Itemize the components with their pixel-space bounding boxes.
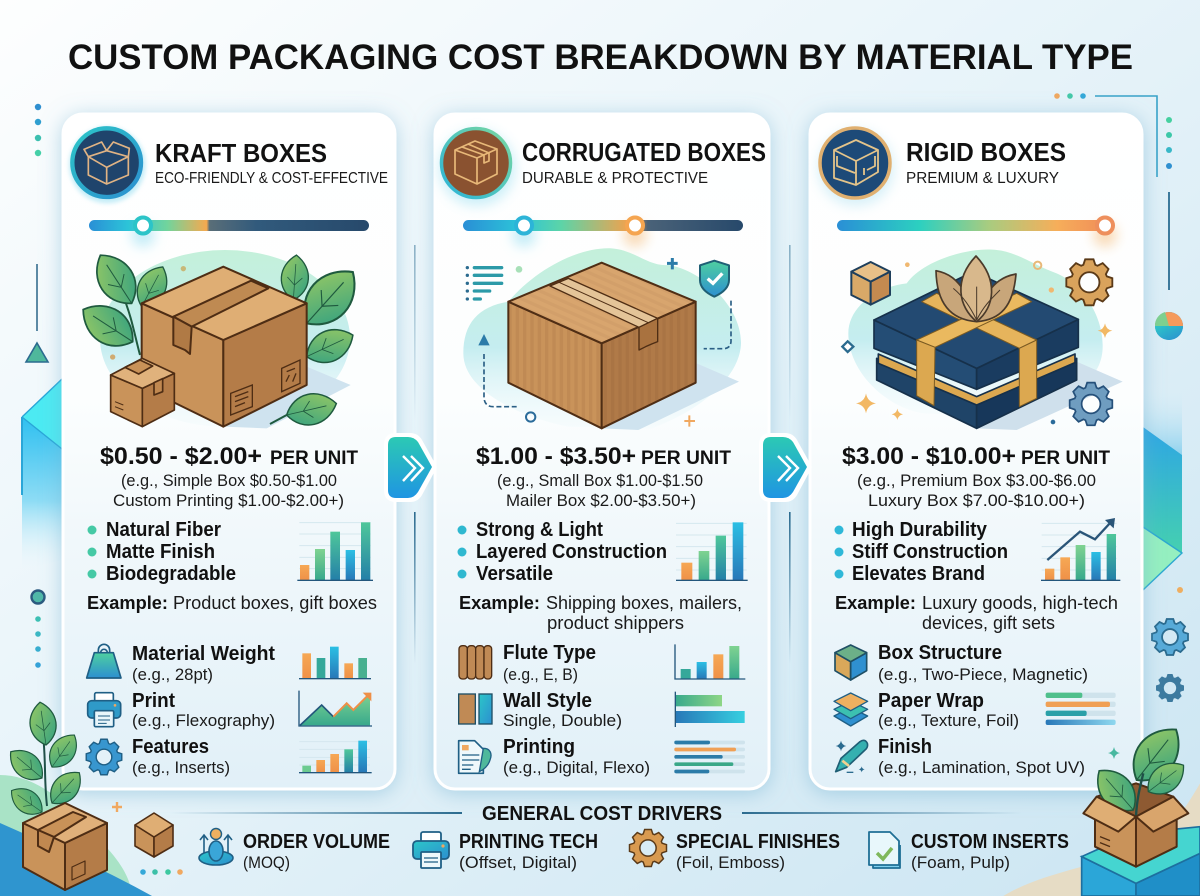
icon: document with check — [869, 832, 900, 868]
price: PER UNIT — [641, 448, 731, 469]
example: Product boxes, gift boxes — [173, 593, 377, 613]
arrow: corrugated to rigid — [759, 433, 812, 502]
bar chart: features — [297, 522, 373, 581]
price — [842, 443, 1110, 470]
icon: gear — [86, 739, 122, 775]
feature list: Stiff Construction — [852, 541, 1008, 563]
icon: gear — [630, 830, 666, 866]
card subtitle: DURABLE & PROTECTIVE — [522, 170, 708, 187]
feature list: Biodegradable — [106, 563, 236, 585]
progress bars: printing — [674, 741, 745, 773]
driver: printing tech — [413, 831, 598, 872]
panel: rigid boxes — [810, 114, 1142, 789]
example: Example: — [459, 593, 540, 613]
feature list: Elevates Brand — [852, 563, 985, 585]
left side decoration — [21, 104, 62, 668]
bottom left corner illustration: plant and box — [3, 700, 107, 890]
driver: order volume — [199, 828, 390, 872]
row: finish: Finish — [878, 736, 932, 758]
price: $1.00 - $3.50+ — [476, 443, 636, 470]
icon: pen with sparkles — [836, 740, 868, 772]
feature list — [458, 519, 667, 585]
row: print: (e.g., Flexography) — [132, 711, 275, 730]
row: flute type — [459, 642, 745, 684]
small box and dots, bottom left — [112, 802, 183, 875]
price — [476, 443, 731, 470]
title: CUSTOM PACKAGING COST BREAKDOWN BY MATERIAL TYPE — [68, 38, 1133, 77]
row: printing: Printing — [503, 736, 575, 758]
price examples: Mailer Box $2.00-$3.50+) — [506, 491, 696, 510]
price examples — [497, 471, 703, 510]
row: features: (e.g., Inserts) — [132, 758, 230, 777]
cost slider — [463, 218, 743, 247]
example — [459, 593, 742, 633]
row: flute type: (e.g., E, B) — [503, 665, 578, 684]
example: Example: — [835, 593, 916, 613]
icon: layers — [834, 693, 868, 726]
feature list — [88, 519, 236, 585]
icon: rigid box badge — [818, 128, 894, 206]
row: material weight: Material Weight — [132, 643, 275, 665]
icon: weight — [87, 644, 121, 678]
driver: special finishes: SPECIAL FINISHES — [676, 831, 840, 853]
icon: wall panels — [459, 694, 492, 724]
row: features: Features — [132, 736, 209, 758]
area chart: print — [299, 691, 372, 726]
driver: special finishes: (Foil, Emboss) — [676, 853, 785, 872]
row: print — [88, 690, 372, 730]
driver: custom inserts: (Foam, Pulp) — [911, 853, 1010, 872]
icon: document — [459, 741, 491, 773]
icon: cube — [851, 262, 890, 305]
price examples: Luxury Box $7.00-$10.00+) — [868, 491, 1085, 510]
price: PER UNIT — [1021, 448, 1110, 469]
icon: flute columns — [459, 646, 492, 679]
feature list: High Durability — [852, 519, 988, 541]
feature list: Natural Fiber — [106, 519, 221, 541]
terrain behind bottom left corner — [0, 775, 152, 896]
price examples — [113, 471, 344, 510]
feature list: Matte Finish — [106, 541, 215, 563]
price — [100, 443, 358, 470]
panel: kraft boxes — [63, 114, 395, 789]
example — [835, 593, 1118, 633]
row: printing — [459, 736, 745, 777]
row: flute type: Flute Type — [503, 642, 596, 664]
row: wall style: Wall Style — [503, 690, 592, 712]
card subtitle: PREMIUM & LUXURY — [906, 170, 1059, 187]
bar chart: wall style — [675, 692, 745, 727]
row: print: Print — [132, 690, 175, 712]
icon: people with arrows — [199, 828, 233, 865]
row: paper wrap: (e.g., Texture, Foil) — [878, 711, 1019, 730]
driver: order volume: ORDER VOLUME — [243, 831, 390, 853]
illustration: corrugated box — [463, 248, 741, 430]
row: features — [86, 736, 372, 777]
icon: small sparkle — [1108, 747, 1120, 759]
footer: general cost drivers — [170, 803, 1069, 872]
driver: order volume: (MOQ) — [243, 853, 290, 872]
example: Luxury goods, high-tech — [922, 593, 1118, 613]
icon: corrugated box badge — [439, 128, 515, 206]
price: $0.50 - $2.00+ — [100, 443, 262, 470]
price examples: (e.g., Premium Box $3.00-$6.00 — [857, 471, 1096, 490]
price examples: (e.g., Simple Box $0.50-$1.00 — [121, 471, 337, 490]
icon: colored cube — [835, 645, 867, 680]
bar chart: features — [676, 522, 748, 581]
combo chart: features — [1041, 518, 1120, 581]
feature list — [834, 519, 1008, 585]
footer heading: GENERAL COST DRIVERS — [482, 803, 722, 825]
row: material weight — [87, 643, 371, 684]
row: finish — [836, 736, 1120, 777]
price: $3.00 - $10.00+ — [842, 443, 1016, 470]
row: paper wrap — [834, 690, 1116, 730]
row: box structure: (e.g., Two-Piece, Magnetic) — [878, 665, 1088, 684]
right side decoration — [1054, 93, 1188, 702]
example — [87, 593, 377, 613]
row: box structure — [835, 642, 1088, 684]
cost slider — [837, 218, 1117, 247]
row: finish: (e.g., Lamination, Spot UV) — [878, 758, 1085, 777]
feature list: Layered Construction — [476, 541, 667, 563]
bar chart: flute type — [675, 644, 745, 679]
driver: printing tech: (Offset, Digital) — [459, 853, 577, 872]
price examples — [857, 471, 1096, 510]
bar chart: material weight — [299, 647, 371, 679]
feature list: Strong & Light — [476, 519, 603, 541]
row: printing: (e.g., Digital, Flexo) — [503, 758, 650, 777]
card subtitle: ECO-FRIENDLY & COST-EFFECTIVE — [155, 170, 388, 187]
cost slider — [89, 218, 369, 247]
row: paper wrap: Paper Wrap — [878, 690, 984, 712]
row: wall style: Single, Double) — [503, 711, 622, 730]
illustration: rigid gift box — [842, 249, 1123, 430]
example: product shippers — [547, 613, 684, 633]
bar chart: features detail — [299, 741, 372, 773]
driver: custom inserts: CUSTOM INSERTS — [911, 831, 1069, 853]
example: devices, gift sets — [922, 613, 1055, 633]
icon: kraft open box badge — [69, 127, 146, 203]
price examples: (e.g., Small Box $1.00-$1.50 — [497, 471, 703, 490]
progress bars: paper wrap — [1046, 693, 1116, 725]
bottom right corner illustration: open box with plant — [1003, 718, 1200, 896]
driver: special finishes — [630, 830, 840, 872]
card title: RIGID BOXES — [906, 137, 1066, 167]
example: Shipping boxes, mailers, — [546, 593, 742, 613]
price examples: Custom Printing $1.00-$2.00+) — [113, 491, 344, 510]
row: material weight: (e.g., 28pt) — [132, 665, 213, 684]
row: wall style — [459, 690, 745, 730]
card title: KRAFT BOXES — [155, 138, 327, 168]
card title: CORRUGATED BOXES — [522, 137, 766, 167]
driver: printing tech: PRINTING TECH — [459, 831, 598, 853]
example: Example: — [87, 593, 168, 613]
driver: custom inserts — [869, 831, 1069, 872]
illustration: kraft boxes with leaves — [74, 246, 368, 430]
price: PER UNIT — [270, 448, 358, 469]
panel: corrugated boxes — [435, 114, 769, 789]
feature list: Versatile — [476, 563, 553, 585]
arrow: kraft to corrugated — [384, 433, 437, 502]
row: box structure: Box Structure — [878, 642, 1002, 664]
icon: printer — [413, 832, 449, 868]
icon: printer — [88, 693, 121, 727]
